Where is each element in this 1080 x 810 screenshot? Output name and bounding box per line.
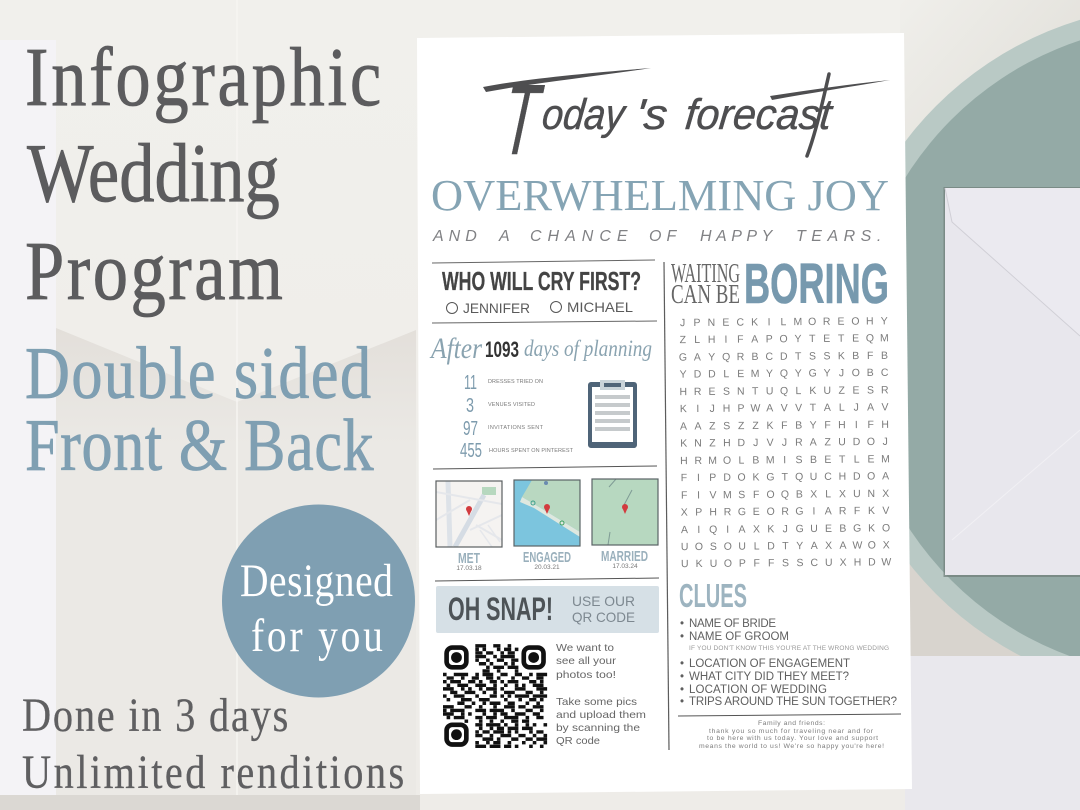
word search grid: XPHRGEORGIARFKV — [681, 505, 889, 519]
stat rows: 11 — [464, 372, 477, 394]
plate — [835, 5, 1080, 695]
word search grid: UOSOULDTYAXAWOX — [681, 539, 890, 553]
stat rows: 3 — [466, 395, 474, 417]
QR instructions: photos too! — [556, 669, 616, 681]
stat rows: DRESSES TRIED ON — [488, 379, 543, 385]
thank you note — [699, 720, 884, 750]
panel: waiting can be boring: CAN BE — [671, 279, 740, 309]
map labels — [456, 548, 648, 572]
left heading: Infographic Wedding Program — [25, 30, 381, 317]
clue list: LOCATION OF WEDDING — [689, 684, 827, 696]
envelope — [944, 187, 1080, 577]
title: T — [498, 64, 548, 176]
panel: who will cry first: MICHAEL — [567, 299, 633, 315]
QR instructions: QR code — [556, 735, 600, 747]
QR instructions — [556, 642, 646, 747]
panel: oh snap banner: USE OUR — [572, 593, 635, 609]
left heading: Infographic Wedding Program: Infographic — [25, 30, 381, 123]
map labels: ENGAGED — [523, 549, 571, 566]
left footnote: turnaround — [22, 689, 404, 799]
panel: oh snap banner — [436, 586, 659, 633]
word search grid: ZLHIFAPOYTETEQM — [680, 332, 889, 346]
clue list: • — [680, 684, 684, 696]
left footnote: turnaround: Unlimited renditions — [22, 746, 404, 799]
stat rows: HOURS SPENT ON PINTEREST — [489, 448, 574, 454]
map labels: 20.03.21 — [534, 564, 560, 571]
panel: oh snap banner: QR CODE — [572, 609, 635, 625]
QR instructions: and upload them — [556, 709, 646, 721]
subheadline: HAPPY — [700, 228, 777, 245]
clue list: • — [680, 658, 684, 670]
stats heading — [429, 332, 652, 365]
panel: who will cry first: WHO WILL CRY FIRST? — [442, 266, 641, 296]
word search grid: YDDLEMYQYGYJOBC — [680, 367, 889, 381]
QR code — [443, 646, 547, 746]
stat rows: 97 — [463, 418, 478, 440]
map labels: 17.03.24 — [612, 563, 638, 570]
word search grid: UKUOPFFSSCUXHDW — [681, 556, 891, 570]
panel: clues: CLUES — [679, 577, 747, 614]
word search grid: HRESNTUQLKUZESR — [679, 384, 889, 398]
stats heading: After — [429, 332, 482, 365]
subheadline: A — [498, 228, 510, 245]
title: forecast — [683, 91, 836, 139]
left subheading: double sided — [25, 332, 374, 486]
stat rows: VENUES VISITED — [488, 402, 535, 408]
map labels: MARRIED — [601, 548, 648, 565]
clue list: IF YOU DON'T KNOW THIS YOU'RE AT THE WRONG WEDDING — [689, 645, 889, 652]
map labels: 17.03.18 — [456, 565, 482, 572]
badge: designed for you: Designed — [240, 555, 393, 607]
word search grid: AAZSZZKFBYFHIFH — [680, 419, 889, 433]
clue list: • — [680, 671, 684, 683]
clue list: NAME OF BRIDE — [689, 618, 776, 630]
clue list: WHAT CITY DID THEY MEET? — [689, 671, 849, 683]
QR instructions: by scanning the — [556, 722, 640, 734]
left heading: Infographic Wedding Program: Wedding — [27, 126, 280, 219]
map: met — [436, 481, 502, 547]
QR instructions: We want to — [556, 642, 614, 654]
clue list: NAME OF GROOM — [689, 631, 789, 643]
panel: program card — [417, 33, 912, 794]
word search grid: FIVMSFOQBXLXUNX — [681, 488, 889, 502]
word search grid: JPNECKILMOREOHY — [680, 315, 888, 329]
subheadline: AND — [432, 228, 482, 245]
clue list: • — [680, 618, 684, 630]
panel: planning stats — [429, 332, 657, 469]
title: 's — [633, 91, 670, 139]
thank you note: to be here with us today. Your love and support — [707, 735, 878, 742]
left subheading: double sided: Front & Back — [25, 404, 374, 486]
map: engaged — [514, 480, 580, 546]
QR instructions: Take some pics — [556, 696, 637, 708]
clue list: LOCATION OF ENGAGEMENT — [689, 658, 850, 670]
panel: who will cry first — [432, 260, 657, 323]
white paper bottom right — [905, 656, 1080, 810]
stats heading: 1093 — [485, 337, 519, 362]
column divider — [664, 262, 669, 750]
stat rows — [460, 372, 574, 462]
panel: who will cry first: JENNIFER — [463, 300, 530, 316]
badge: designed for you — [222, 504, 415, 698]
word search grid: GAYQRBCDTSSKBFB — [679, 350, 888, 364]
thank you note: thank you so much for traveling near and for — [709, 728, 874, 735]
clue list: • — [680, 696, 684, 708]
subheadline: TEARS. — [796, 228, 887, 245]
panel: oh snap banner: OH SNAP! — [448, 591, 553, 627]
map: married — [592, 479, 658, 545]
word search grid: FIPDOKGTQUCHDOA — [681, 470, 889, 484]
panel: maps — [435, 479, 659, 581]
left footnote: turnaround: Done in 3 days — [22, 689, 288, 742]
title: oday — [540, 91, 629, 139]
left subheading: double sided: Double sided — [25, 332, 371, 414]
left heading: Infographic Wedding Program: Program — [25, 224, 283, 317]
stat rows: INVITATIONS SENT — [488, 425, 544, 431]
panel: waiting can be boring — [671, 252, 889, 316]
map labels: MET — [458, 550, 480, 567]
clue list — [680, 618, 897, 708]
word search grid — [679, 315, 891, 570]
subheadline: CHANCE — [530, 228, 634, 245]
word search grid: KIJHPWAVVTALJAV — [680, 401, 889, 415]
headline: OVERWHELMING JOY — [431, 171, 889, 220]
title — [483, 64, 890, 176]
thank you note: Family and friends: — [758, 720, 825, 727]
clue list: TRIPS AROUND THE SUN TOGETHER? — [689, 696, 897, 708]
stat rows: 455 — [460, 440, 482, 462]
clue list: • — [680, 631, 684, 643]
thank you note: means the world to us! We're so happy you're here! — [699, 743, 884, 750]
panel: waiting can be boring: WAITING — [671, 258, 740, 288]
word search grid: AIQIAXKJGUEBGKO — [681, 522, 890, 536]
word search grid: HRMOLBMISBETLEM — [680, 453, 890, 467]
word search grid: KNZHDJVJRAZUDOJ — [680, 436, 888, 450]
subheadline: OF — [649, 228, 681, 245]
panel: clues — [678, 577, 901, 716]
stats heading: days of planning — [524, 336, 652, 361]
panel: waiting can be boring: BORING — [744, 252, 889, 316]
QR instructions: see all your — [556, 655, 617, 667]
icon: clipboard — [588, 380, 637, 448]
badge: designed for you: for you — [251, 610, 383, 662]
